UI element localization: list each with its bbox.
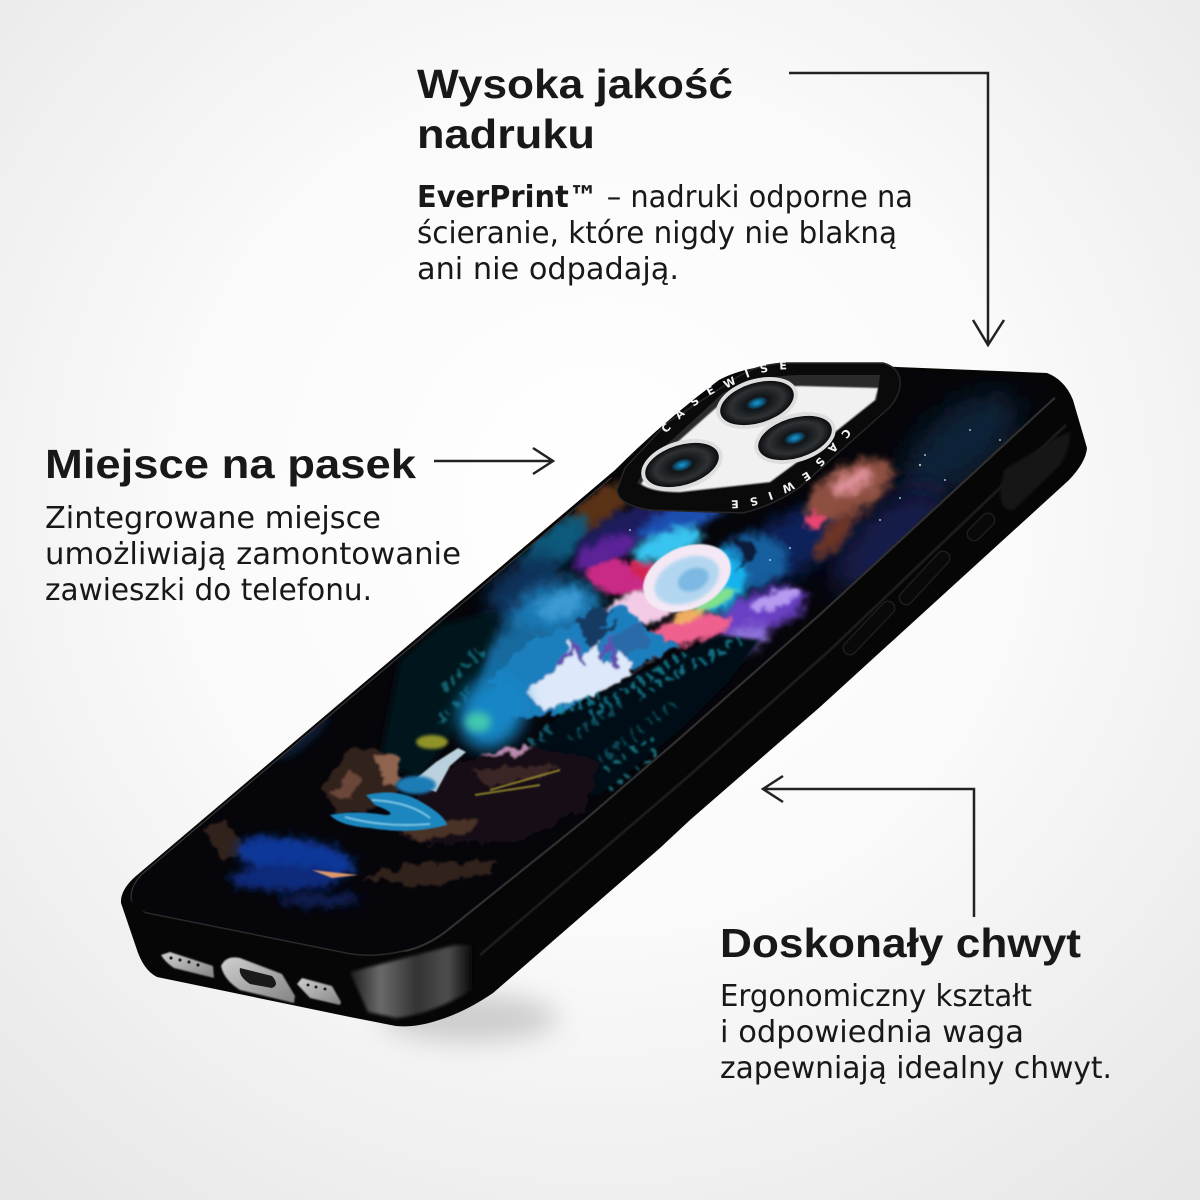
heading: Miejsce na pasek (45, 441, 416, 487)
colourful ground streaks (475, 770, 560, 795)
heading (417, 61, 733, 157)
left speaker grille (161, 952, 214, 978)
body text: i odpowiednia waga (720, 1015, 1024, 1050)
dim blue foliage on the left (276, 716, 332, 763)
heading: Wysoka jakość (417, 61, 733, 107)
waterfall (412, 748, 466, 792)
callout: strap slot (45, 441, 553, 608)
body text (417, 180, 913, 287)
arrow to the printed back (789, 73, 1004, 345)
side recess near the top corner (1000, 432, 1070, 510)
lens top (710, 368, 804, 438)
blue pool (230, 830, 362, 907)
lens left (635, 430, 729, 500)
arrow to case side (763, 776, 974, 917)
callout: grip (720, 776, 1112, 1086)
charging port (221, 957, 295, 1003)
rocks (205, 745, 600, 888)
stars (629, 429, 1001, 561)
body text (720, 979, 1112, 1086)
body text: umożliwiają zamontowanie (45, 537, 461, 572)
phone drop shadow (382, 994, 558, 1042)
bumper branding top: CASEWISE (662, 362, 786, 432)
body text: EverPrint™ – nadruki odporne na (417, 180, 913, 215)
bottom corner sheen (350, 945, 472, 1018)
heading: nadruku (417, 111, 595, 157)
moon (642, 543, 732, 613)
mountains (490, 605, 680, 720)
camera plate (641, 386, 878, 492)
camera bumper (617, 363, 900, 513)
screen artwork (132, 376, 1054, 954)
upper bezel edge (132, 478, 612, 900)
camera opening shadow (637, 375, 880, 493)
right speaker grille (297, 978, 341, 1005)
evergreen forest (380, 610, 760, 800)
side groove (480, 425, 1066, 955)
body text: zawieszki do telefonu. (45, 573, 372, 608)
body text: zapewniają idealny chwyt. (720, 1051, 1112, 1086)
lower bezel edge (132, 900, 404, 954)
body text: Zintegrowane miejsce (45, 501, 381, 536)
body text: ścieranie, które nigdy nie blakną (417, 216, 897, 251)
callout: print quality (417, 61, 1004, 345)
bumper branding bottom: CASEWISE (732, 430, 850, 508)
orange streak (312, 870, 358, 878)
body text: Ergonomiczny kształt (720, 979, 1032, 1014)
camera island (616, 362, 901, 514)
side buttons (850, 520, 988, 648)
arrow to strap slot (434, 448, 553, 474)
sky nebula (455, 374, 1035, 700)
lens right (748, 403, 842, 473)
body text (45, 501, 461, 608)
river (330, 792, 447, 831)
rim highlight (404, 397, 1054, 950)
valley glow (445, 663, 539, 761)
body text: ani nie odpadają. (417, 252, 679, 287)
heading: Doskonały chwyt (720, 920, 1081, 966)
phone case (120, 362, 1087, 1026)
case body silhouette (121, 363, 1087, 1026)
